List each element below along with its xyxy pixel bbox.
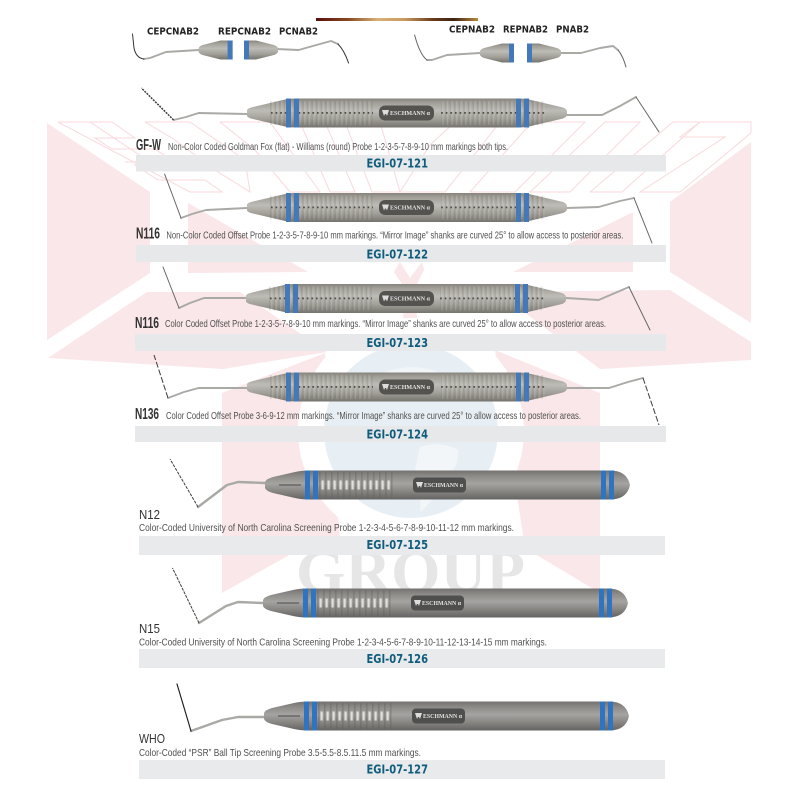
heading N116 second: N116 bbox=[135, 315, 159, 332]
background watermark: GROUP bbox=[296, 539, 525, 605]
top right partial probes bbox=[415, 24, 626, 67]
code bar EGI-07-122: EGI-07-122 bbox=[366, 246, 428, 262]
caption WHO: Color-Coded “PSR” Ball Tip Screening Probe 3.5-5.5-8.5.11.5 mm markings. bbox=[139, 747, 421, 759]
probe N136: ESCHMANN α bbox=[390, 384, 430, 391]
code bar EGI-07-126: EGI-07-126 bbox=[366, 651, 428, 666]
probe N116 non-color bbox=[136, 174, 666, 262]
part numbers right: PNAB2 bbox=[556, 24, 589, 36]
probe WHO bbox=[139, 684, 665, 779]
heading N12: N12 bbox=[139, 507, 160, 522]
part numbers right: REPNAB2 bbox=[503, 24, 548, 36]
probe N116 non-color: ESCHMANN α bbox=[390, 204, 430, 212]
probe N12: ESCHMANN α bbox=[424, 482, 463, 489]
probe N15 bbox=[139, 568, 665, 668]
code bar EGI-07-124: EGI-07-124 bbox=[366, 426, 428, 442]
caption N116 second: Color Coded Offset Probe 1-2-3-5-7-8-9-10 mm markings. “Mirror Image” shanks are curved 25° to allow access to posterior areas. bbox=[165, 318, 606, 330]
part numbers left: CEPCNAB2 bbox=[147, 26, 199, 38]
probe N116 color coded: ESCHMANN α bbox=[390, 296, 430, 302]
heading N136: N136 bbox=[135, 406, 159, 423]
part numbers right: CEPNAB2 bbox=[449, 24, 495, 36]
code bar EGI-07-125 bbox=[139, 536, 665, 555]
caption N12: Color-Coded University of North Carolina Screening Probe 1-2-3-4-5-6-7-8-9-10-11-12 mm markings. bbox=[139, 522, 514, 534]
code bar EGI-07-125: EGI-07-125 bbox=[366, 537, 428, 552]
code bar EGI-07-124 bbox=[135, 426, 666, 442]
code bar EGI-07-126 bbox=[139, 649, 665, 668]
probe N116 color coded bbox=[135, 267, 666, 351]
top left partial probes bbox=[132, 26, 349, 63]
code bar EGI-07-123 bbox=[135, 334, 666, 351]
heading N116: N116 bbox=[136, 226, 160, 242]
heading WHO: WHO bbox=[139, 731, 165, 746]
code bar EGI-07-127: EGI-07-127 bbox=[366, 762, 428, 776]
probe WHO: ESCHMANN α bbox=[423, 713, 462, 720]
part numbers right bbox=[449, 24, 589, 36]
probe N136 bbox=[135, 355, 666, 442]
caption N136: Color Coded Offset Probe 3-6-9-12 mm markings. “Mirror Image” shanks are curved 25° to allow access to posterior areas. bbox=[166, 410, 581, 422]
heading N15: N15 bbox=[139, 621, 160, 636]
caption GF-W: Non-Color Coded Goldman Fox (flat) - Williams (round) Probe 1-2-3-5-7-8-9-10 mm markings both tips. bbox=[168, 141, 508, 153]
probe GF-W bbox=[136, 88, 666, 172]
probe N15: ESCHMANN α bbox=[422, 600, 461, 607]
caption N15: Color-Coded University of North Carolina Screening Probe 1-2-3-4-5-6-7-8-9-10-11-12-13-14-15 mm markings. bbox=[139, 636, 547, 648]
code bar EGI-07-121 bbox=[136, 155, 666, 172]
part numbers left: REPCNAB2 bbox=[218, 26, 271, 38]
decorative top gradient line bbox=[316, 18, 478, 21]
part numbers left bbox=[147, 26, 318, 38]
probe GF-W: ESCHMANN α bbox=[390, 110, 430, 117]
code bar EGI-07-123: EGI-07-123 bbox=[366, 335, 428, 350]
code bar EGI-07-127 bbox=[139, 760, 665, 779]
code bar EGI-07-122 bbox=[136, 245, 666, 262]
probe N12 bbox=[139, 459, 665, 555]
heading GF-W: GF-W bbox=[136, 137, 162, 154]
part numbers left: PCNAB2 bbox=[279, 26, 318, 38]
code bar EGI-07-121: EGI-07-121 bbox=[366, 156, 428, 170]
caption N116: Non-Color Coded Offset Probe 1-2-3-5-7-8-9-10 mm markings. “Mirror Image” shanks are curved 25° to allow access to posterior areas. bbox=[166, 230, 623, 242]
